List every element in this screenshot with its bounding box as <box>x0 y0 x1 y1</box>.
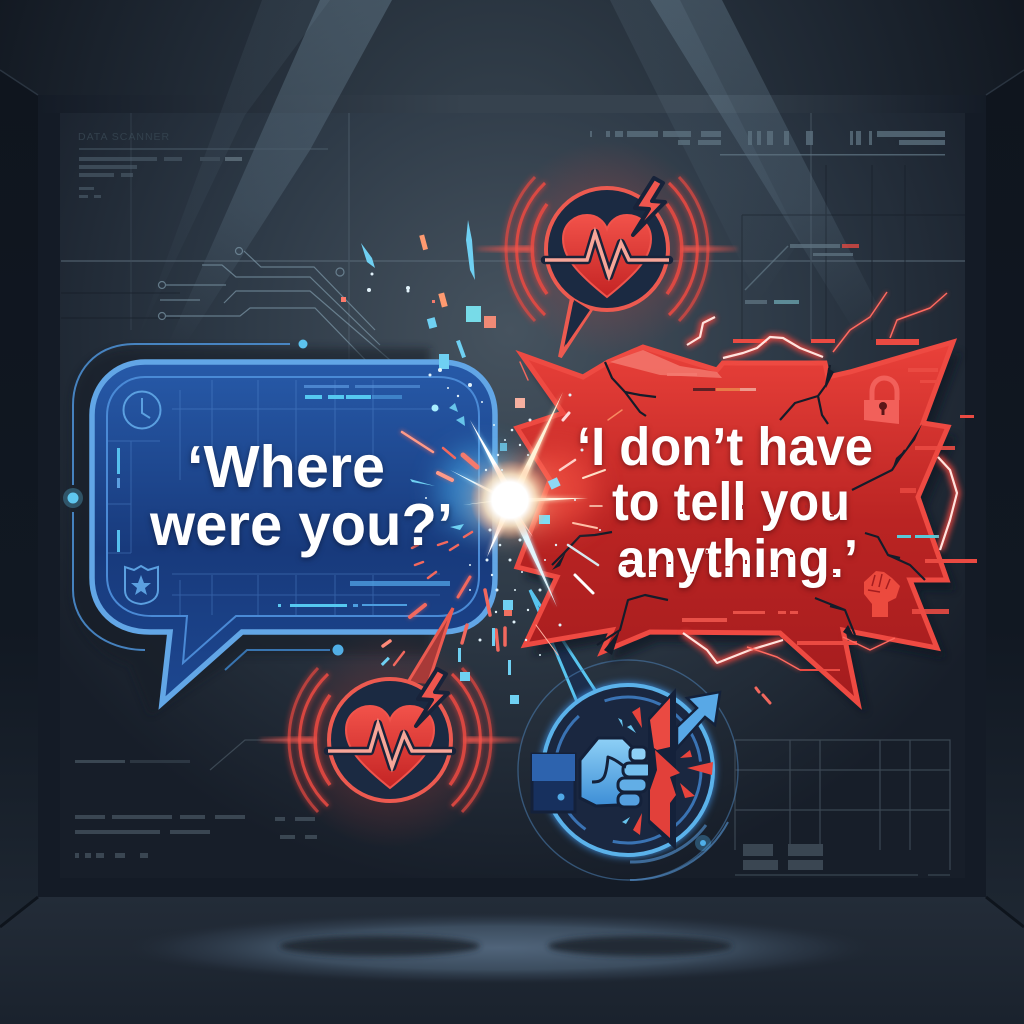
glitch bars around red bubble <box>733 339 977 671</box>
bubble shadow <box>525 352 961 713</box>
bubble backing shadow <box>72 348 430 715</box>
blue bubble text: ‘Where <box>187 434 385 500</box>
lightning arcs <box>683 292 957 670</box>
broken red wall <box>648 688 680 850</box>
upward arrow <box>677 692 720 748</box>
icon: padlock <box>864 378 899 424</box>
bubble highlights <box>610 350 798 622</box>
red bubble text <box>577 417 873 589</box>
red bubble text: anything.’ <box>617 529 858 589</box>
lower heart icon <box>260 608 520 848</box>
speck particles <box>367 272 601 656</box>
bottom left data bars <box>75 740 317 858</box>
circuit lines <box>158 248 390 375</box>
streaks on red side <box>536 410 622 655</box>
tapered light rays <box>450 392 588 607</box>
bubble body <box>92 362 495 703</box>
bubble grid <box>108 380 440 615</box>
blue bubble text <box>149 434 453 558</box>
fist breaking wall icon <box>518 590 738 880</box>
icon: raised fist <box>864 571 900 617</box>
cracks <box>552 362 925 645</box>
icon tail <box>530 590 595 702</box>
blue bubble text: were you?’ <box>149 492 453 558</box>
icon: clock <box>124 392 160 428</box>
status bars <box>117 385 450 607</box>
cuff <box>532 754 575 812</box>
light beams <box>135 0 880 345</box>
blue speech bubble <box>63 340 495 715</box>
bubble body <box>517 342 953 703</box>
lightning glow <box>683 317 957 663</box>
red shards <box>383 362 770 703</box>
floor shadows <box>125 912 875 984</box>
blue shards <box>361 220 561 704</box>
crack edge notches <box>552 368 922 655</box>
spark burst <box>341 220 770 704</box>
background grid lines <box>61 113 965 430</box>
burst glow <box>438 448 522 532</box>
text grunge specks <box>622 505 836 575</box>
wall fragments <box>632 707 713 835</box>
red bubble text: ‘I don’t have <box>577 417 873 477</box>
red bubble text: to tell you <box>612 472 850 532</box>
lightning core <box>683 317 957 663</box>
icon: police badge <box>125 566 158 604</box>
data scanner header <box>78 131 328 198</box>
bottom right grid schematic <box>735 740 950 875</box>
upper red and pink particles <box>341 234 525 616</box>
burst core <box>470 460 550 540</box>
fist <box>580 738 653 807</box>
thin red lightning <box>747 292 947 670</box>
red jagged speech bubble <box>517 342 961 713</box>
back wall screen panel <box>60 113 965 878</box>
data scanner header: DATA SCANNER <box>78 131 170 143</box>
top heart speech icon <box>477 141 737 357</box>
tapered light rays glow <box>452 392 587 607</box>
top right data bars <box>590 131 945 304</box>
bubble outer wire <box>73 344 330 670</box>
